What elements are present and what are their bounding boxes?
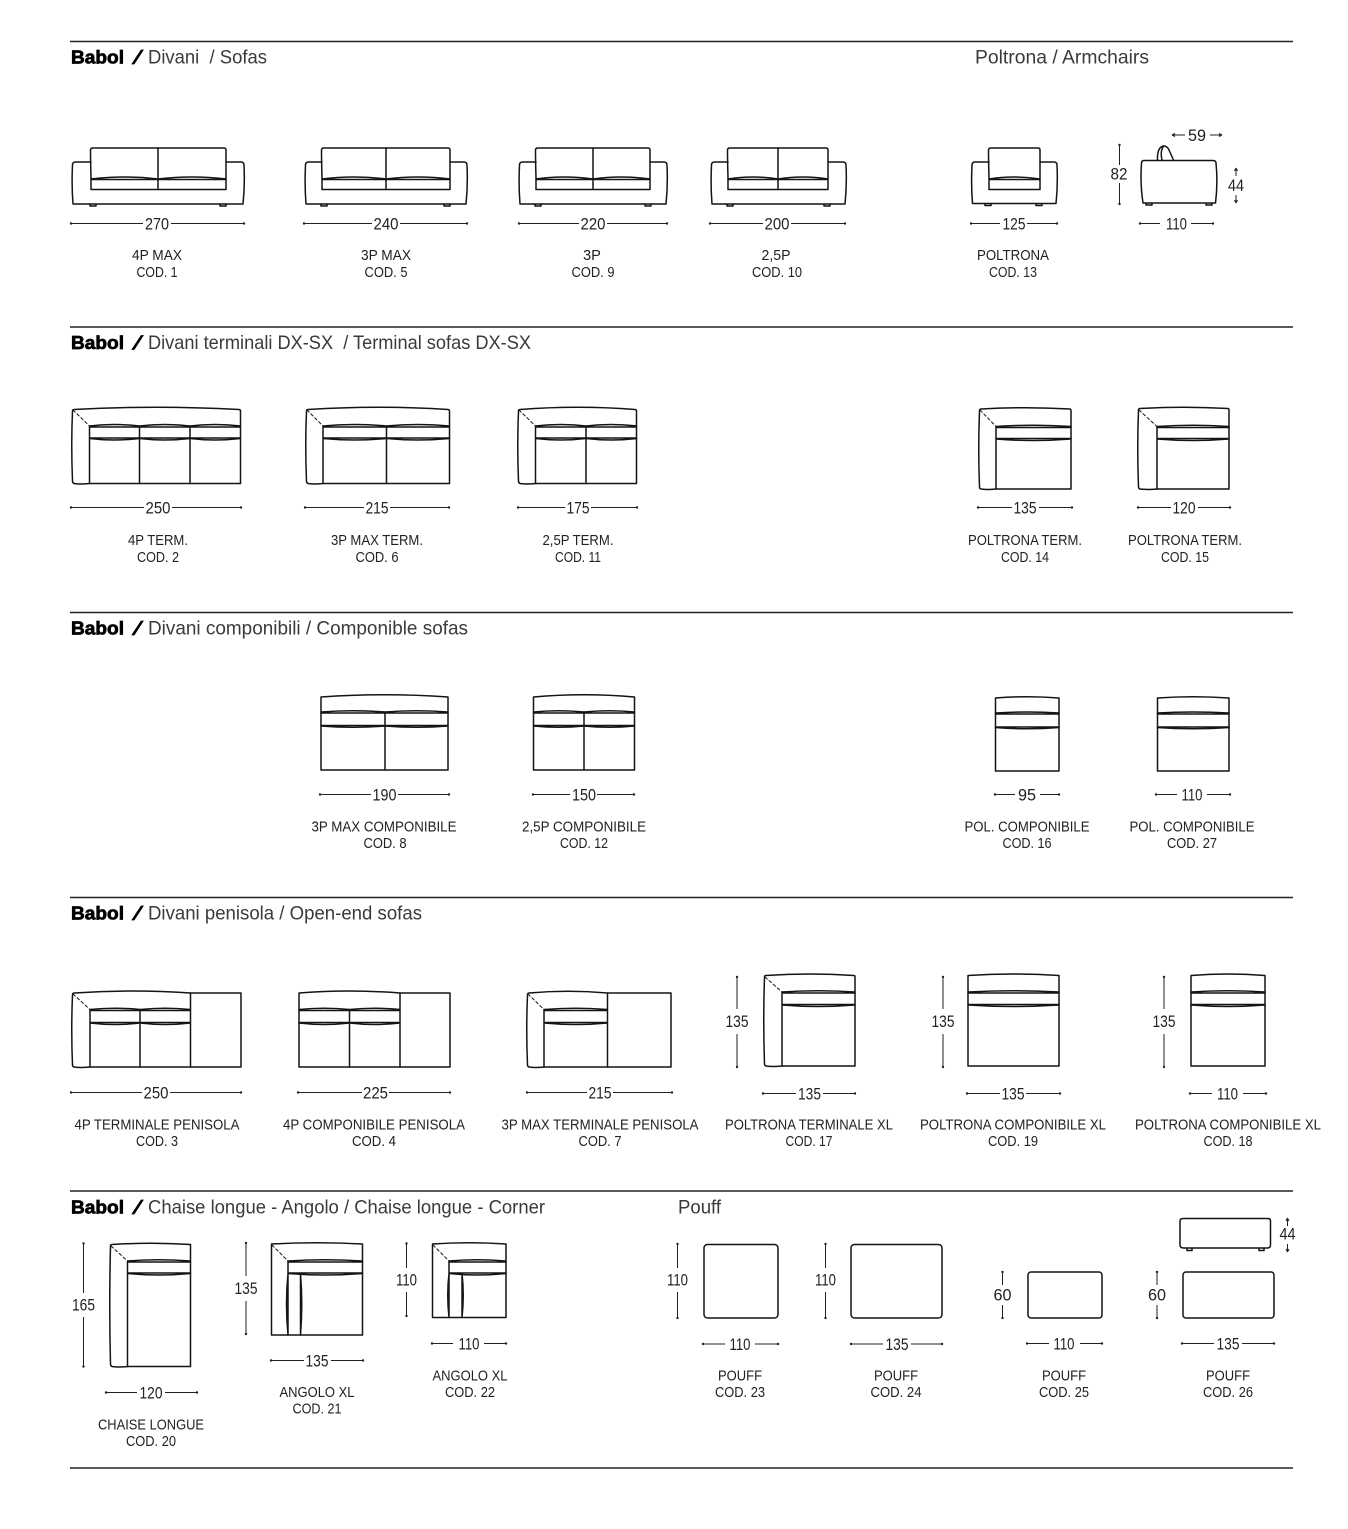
panel: open-end sofas xyxy=(70,898,1321,1150)
label xyxy=(1128,533,1242,566)
label xyxy=(1203,1368,1253,1401)
dimension 175: 175 xyxy=(566,498,590,518)
label: COD. 11 xyxy=(555,550,601,566)
dimension width 110: 110 xyxy=(458,1334,480,1354)
heading: sofas: / xyxy=(130,47,145,68)
dimension 59: 59 xyxy=(1188,126,1206,145)
dimension height 60 xyxy=(1148,1272,1166,1318)
icon: sofa front 200 xyxy=(711,148,846,206)
label: COD. 26 xyxy=(1203,1385,1253,1401)
label: 3P MAX TERMINALE PENISOLA xyxy=(502,1118,699,1134)
label: COD. 13 xyxy=(989,265,1037,281)
item: 3P MAX COMPONIBILE xyxy=(312,695,457,852)
item: POUFF 23 xyxy=(667,1244,778,1401)
dimension width 110: 110 xyxy=(1217,1084,1238,1104)
dimension seat height 44 xyxy=(1280,1218,1296,1252)
icon: XL terminal armchair xyxy=(764,974,855,1066)
item: 2,5P TERM. xyxy=(518,407,637,566)
dimension width 135 xyxy=(851,1335,942,1354)
item: 2,5P COMPONIBILE xyxy=(522,695,646,852)
label xyxy=(432,1368,508,1401)
icon: corner 135 xyxy=(272,1243,362,1335)
icon: terminal sofa 175 xyxy=(518,407,636,484)
label: POLTRONA TERM. xyxy=(968,533,1082,549)
item: POL. COMPONIBILE 95 xyxy=(964,697,1090,852)
label: COD. 24 xyxy=(870,1385,922,1401)
label xyxy=(1039,1368,1089,1401)
label: COD. 16 xyxy=(1002,836,1052,852)
label: COD. 4 xyxy=(352,1134,396,1150)
dimension height 82: 82 xyxy=(1110,164,1128,184)
icon: pouff small xyxy=(1028,1272,1102,1318)
icon: open-end sofa 215 xyxy=(527,991,671,1068)
dimension height 165 xyxy=(72,1244,95,1366)
label: COD. 5 xyxy=(364,265,408,281)
icon: terminal sofa 215 xyxy=(306,407,450,484)
dimension height 135: 135 xyxy=(932,1012,954,1031)
label: POUFF xyxy=(718,1368,762,1384)
dimension width 135: 135 xyxy=(798,1084,821,1104)
label xyxy=(572,248,614,281)
dimension 200: 200 xyxy=(764,214,790,234)
heading: componible sofas: Divani componibili / Componible sofas xyxy=(148,618,468,640)
icon: modular armchair 95 xyxy=(996,697,1059,771)
heading: chaise longue and corner: / xyxy=(130,1197,145,1218)
icon: modular sofa 150 xyxy=(534,695,634,770)
dimension 110 xyxy=(1156,786,1230,804)
label: COD. 15 xyxy=(1161,550,1209,566)
label: COD. 7 xyxy=(578,1134,622,1150)
item: 2,5P xyxy=(710,148,846,281)
dimension seat height 44: 44 xyxy=(1280,1224,1296,1244)
label xyxy=(361,248,411,281)
dimension width 110: 110 xyxy=(730,1335,750,1354)
label: COD. 25 xyxy=(1039,1385,1089,1401)
label xyxy=(542,533,614,566)
label xyxy=(98,1418,204,1450)
dimension 240: 240 xyxy=(374,214,398,234)
item: POUFF 25 xyxy=(994,1272,1102,1401)
dimension height 110: 110 xyxy=(396,1270,417,1290)
label: POL. COMPONIBILE xyxy=(964,820,1090,836)
dimension 270: 270 xyxy=(145,214,169,234)
label: 3P MAX COMPONIBILE xyxy=(312,820,457,836)
label: POLTRONA COMPONIBILE XL xyxy=(920,1118,1106,1134)
label xyxy=(312,820,457,852)
heading: chaise longue and corner: Babol xyxy=(71,1196,124,1218)
dimension 125: 125 xyxy=(1002,214,1026,234)
item: 4P TERM. xyxy=(71,407,241,566)
icon: open-end sofa 250 xyxy=(72,991,241,1068)
dimension width 110: 110 xyxy=(1054,1334,1074,1354)
heading: chaise longue and corner: Chaise longue - Angolo / Chaise longue - Corner xyxy=(148,1196,545,1218)
icon: corner 110 xyxy=(432,1243,506,1318)
dimension 135 xyxy=(978,498,1072,518)
icon: sofa front 240 xyxy=(305,148,467,206)
dimension width 135 xyxy=(271,1352,363,1370)
dimension 95: 95 xyxy=(1018,786,1036,804)
dimension height 165: 165 xyxy=(72,1296,95,1314)
dimension height 135: 135 xyxy=(1152,1012,1176,1031)
label: 2,5P TERM. xyxy=(542,533,614,549)
label: 2,5P xyxy=(762,248,790,264)
dimension 220: 220 xyxy=(580,214,606,234)
label xyxy=(977,248,1049,281)
dimension width 120 xyxy=(106,1384,197,1402)
icon: sofa front 220 xyxy=(519,148,667,206)
dimension height 135 xyxy=(1152,977,1176,1067)
heading: terminal sofas: Divani terminali DX-SX / Terminal sofas DX-SX xyxy=(148,332,531,354)
label: CHAISE LONGUE xyxy=(98,1418,204,1434)
item: 3P MAX TERM. xyxy=(305,407,450,566)
item: ANGOLO XL 135 xyxy=(234,1243,363,1418)
label xyxy=(1135,1118,1321,1150)
label: COD. 19 xyxy=(988,1134,1038,1150)
label: COD. 23 xyxy=(715,1385,765,1401)
label xyxy=(283,1118,465,1150)
label xyxy=(870,1368,922,1401)
heading: terminal sofas: Babol xyxy=(71,332,124,353)
label xyxy=(280,1385,354,1418)
label: 4P COMPONIBILE PENISOLA xyxy=(283,1118,465,1134)
icon: XL modular armchair 110 xyxy=(1191,974,1265,1066)
label xyxy=(964,820,1090,852)
item: POLTRONA TERM. 120 xyxy=(1128,407,1242,566)
label: POUFF xyxy=(1206,1368,1250,1384)
dimension height 60: 60 xyxy=(994,1286,1012,1304)
label: 3P MAX TERM. xyxy=(331,533,423,549)
dimension height 110 xyxy=(815,1244,836,1318)
label: COD. 18 xyxy=(1204,1134,1252,1150)
label xyxy=(132,248,182,281)
label: POLTRONA COMPONIBILE XL xyxy=(1135,1118,1321,1134)
dimension width 110 xyxy=(432,1334,506,1354)
heading: pouff: Pouff xyxy=(678,1196,722,1218)
label: COD. 17 xyxy=(786,1134,832,1150)
label: 4P TERMINALE PENISOLA xyxy=(74,1118,240,1134)
dimension 250: 250 xyxy=(144,1084,168,1102)
dimension width 135: 135 xyxy=(1216,1334,1240,1354)
item: POUFF 26 xyxy=(1148,1218,1296,1401)
label: COD. 9 xyxy=(572,265,614,281)
dimension 95 xyxy=(995,786,1059,804)
dimension height 135 xyxy=(726,977,748,1067)
icon: modular armchair 110 xyxy=(1158,697,1229,771)
label: POLTRONA xyxy=(977,248,1049,264)
icon: sofa front 270 xyxy=(72,148,244,206)
dimension height 110 xyxy=(667,1244,688,1318)
label: POUFF xyxy=(1042,1368,1086,1384)
heading: terminal sofas: / xyxy=(130,333,145,354)
label: COD. 10 xyxy=(752,265,802,281)
dimension height 110: 110 xyxy=(667,1270,688,1290)
dimension height 110 xyxy=(396,1244,417,1316)
label: ANGOLO XL xyxy=(432,1368,508,1384)
label xyxy=(1130,820,1255,852)
dimension height 135 xyxy=(932,977,954,1067)
dimension 250: 250 xyxy=(146,498,170,518)
label: 3P MAX xyxy=(361,248,411,264)
heading: sofas xyxy=(71,46,267,68)
label: ANGOLO XL xyxy=(280,1385,354,1401)
item: POLTRONA TERMINALE XL xyxy=(725,974,893,1150)
heading: armchairs: Poltrona / Armchairs xyxy=(975,46,1149,68)
dimension 150 xyxy=(533,786,634,804)
item: 3P MAX TERMINALE PENISOLA xyxy=(502,991,699,1150)
panel: componible sofas xyxy=(70,612,1293,852)
label xyxy=(725,1118,893,1150)
item: POUFF 24 xyxy=(815,1244,942,1401)
dimension seat height 44: 44 xyxy=(1228,176,1244,195)
label: 4P TERM. xyxy=(128,533,188,549)
label: 4P MAX xyxy=(132,248,182,264)
dimension depth 110: 110 xyxy=(1166,214,1187,234)
panel: chaise longue, corner and pouff xyxy=(70,1191,1296,1468)
icon: open-end sofa 225 xyxy=(299,991,450,1067)
item: CHAISE LONGUE xyxy=(72,1243,204,1450)
heading: sofas: Babol xyxy=(71,46,124,68)
label: 2,5P COMPONIBILE xyxy=(522,820,646,836)
icon: terminal sofa 250 xyxy=(72,407,240,484)
heading: sofas: Divani / Sofas xyxy=(148,46,267,68)
label xyxy=(920,1118,1106,1150)
label: POL. COMPONIBILE xyxy=(1130,820,1255,836)
dimension width 135 xyxy=(1182,1334,1274,1354)
label: COD. 3 xyxy=(136,1134,178,1150)
label: POUFF xyxy=(874,1368,918,1384)
dimension width 110 xyxy=(1190,1084,1266,1104)
item: POLTRONA COMPONIBILE XL 135 xyxy=(920,974,1106,1150)
label: COD. 27 xyxy=(1167,836,1217,852)
dimension width 135: 135 xyxy=(306,1352,328,1370)
icon: pouff square xyxy=(704,1244,778,1318)
dimension width 135 xyxy=(967,1084,1060,1104)
item: POLTRONA TERM. 135 xyxy=(968,408,1082,566)
dimension width 135 xyxy=(763,1084,855,1104)
icon: armchair side xyxy=(1141,146,1217,205)
label: COD. 2 xyxy=(137,550,179,566)
item: ANGOLO XL 110 xyxy=(396,1243,508,1401)
label xyxy=(752,248,802,281)
item: armchair side view xyxy=(1110,126,1244,234)
icon: terminal armchair 135 xyxy=(979,408,1071,490)
label xyxy=(74,1118,240,1150)
dimension height 135: 135 xyxy=(726,1012,748,1031)
dimension 120 xyxy=(1138,498,1230,518)
item: 4P MAX xyxy=(71,148,244,281)
label xyxy=(502,1118,699,1150)
label: COD. 8 xyxy=(364,836,406,852)
dimension height 110: 110 xyxy=(815,1270,836,1290)
icon: armchair front xyxy=(972,148,1057,206)
icon: modular sofa 190 xyxy=(321,695,448,770)
dimension 190 xyxy=(320,786,449,804)
dimension height 60: 60 xyxy=(1148,1286,1166,1304)
item: 3P MAX xyxy=(304,148,467,281)
dimension width 110 xyxy=(703,1335,778,1354)
heading: componible sofas: Babol xyxy=(71,618,124,638)
item: POLTRONA COMPONIBILE XL 110 xyxy=(1135,974,1321,1150)
dimension width 135: 135 xyxy=(886,1335,908,1354)
icon: XL modular armchair 135 xyxy=(968,974,1059,1066)
label: 3P xyxy=(583,248,601,264)
dimension 215: 215 xyxy=(366,498,388,518)
heading: open-end sofas: Divani penisola / Open-end sofas xyxy=(148,902,422,924)
dimension 225: 225 xyxy=(363,1084,388,1102)
item: armchair xyxy=(971,148,1057,281)
label xyxy=(522,820,646,852)
label: COD. 20 xyxy=(126,1434,176,1450)
icon: pouff rectangle xyxy=(851,1244,942,1318)
label xyxy=(128,533,188,566)
panel: sofas xyxy=(70,42,1293,281)
dimension width 120: 120 xyxy=(140,1384,162,1402)
dimension 135: 135 xyxy=(1014,498,1036,518)
dimension height 135 xyxy=(234,1243,258,1334)
item: 4P COMPONIBILE PENISOLA xyxy=(283,991,465,1150)
dimension 175 xyxy=(518,498,637,518)
heading: componible sofas: / xyxy=(130,618,145,639)
item: 3P xyxy=(519,148,667,281)
icon: pouff top view xyxy=(1183,1272,1274,1318)
heading: open-end sofas: Babol xyxy=(71,902,124,924)
dimension width 135: 135 xyxy=(1002,1084,1024,1104)
heading: open-end sofas: / xyxy=(130,903,145,924)
label xyxy=(715,1368,765,1401)
label xyxy=(968,533,1082,566)
panel: terminal sofas xyxy=(70,327,1293,566)
label: COD. 21 xyxy=(292,1402,342,1418)
dimension 150: 150 xyxy=(572,786,596,804)
item: 4P TERMINALE PENISOLA xyxy=(71,991,241,1150)
dimension 120: 120 xyxy=(1172,498,1196,518)
dimension 215: 215 xyxy=(588,1084,612,1102)
label: COD. 22 xyxy=(445,1385,495,1401)
icon: terminal armchair 120 xyxy=(1138,407,1229,490)
dimension 190: 190 xyxy=(372,786,396,804)
label: POLTRONA TERMINALE XL xyxy=(725,1118,893,1134)
icon: chaise longue xyxy=(110,1243,190,1367)
icon: pouff side view xyxy=(1180,1218,1270,1250)
label: COD. 14 xyxy=(1001,550,1049,566)
label: COD. 6 xyxy=(356,550,398,566)
label: COD. 12 xyxy=(560,836,608,852)
dimension height 135: 135 xyxy=(234,1279,258,1298)
label xyxy=(331,533,423,566)
dimension 110: 110 xyxy=(1182,786,1202,804)
label: COD. 1 xyxy=(136,265,178,281)
label: POLTRONA TERM. xyxy=(1128,533,1242,549)
item: POL. COMPONIBILE 110 xyxy=(1130,697,1255,852)
